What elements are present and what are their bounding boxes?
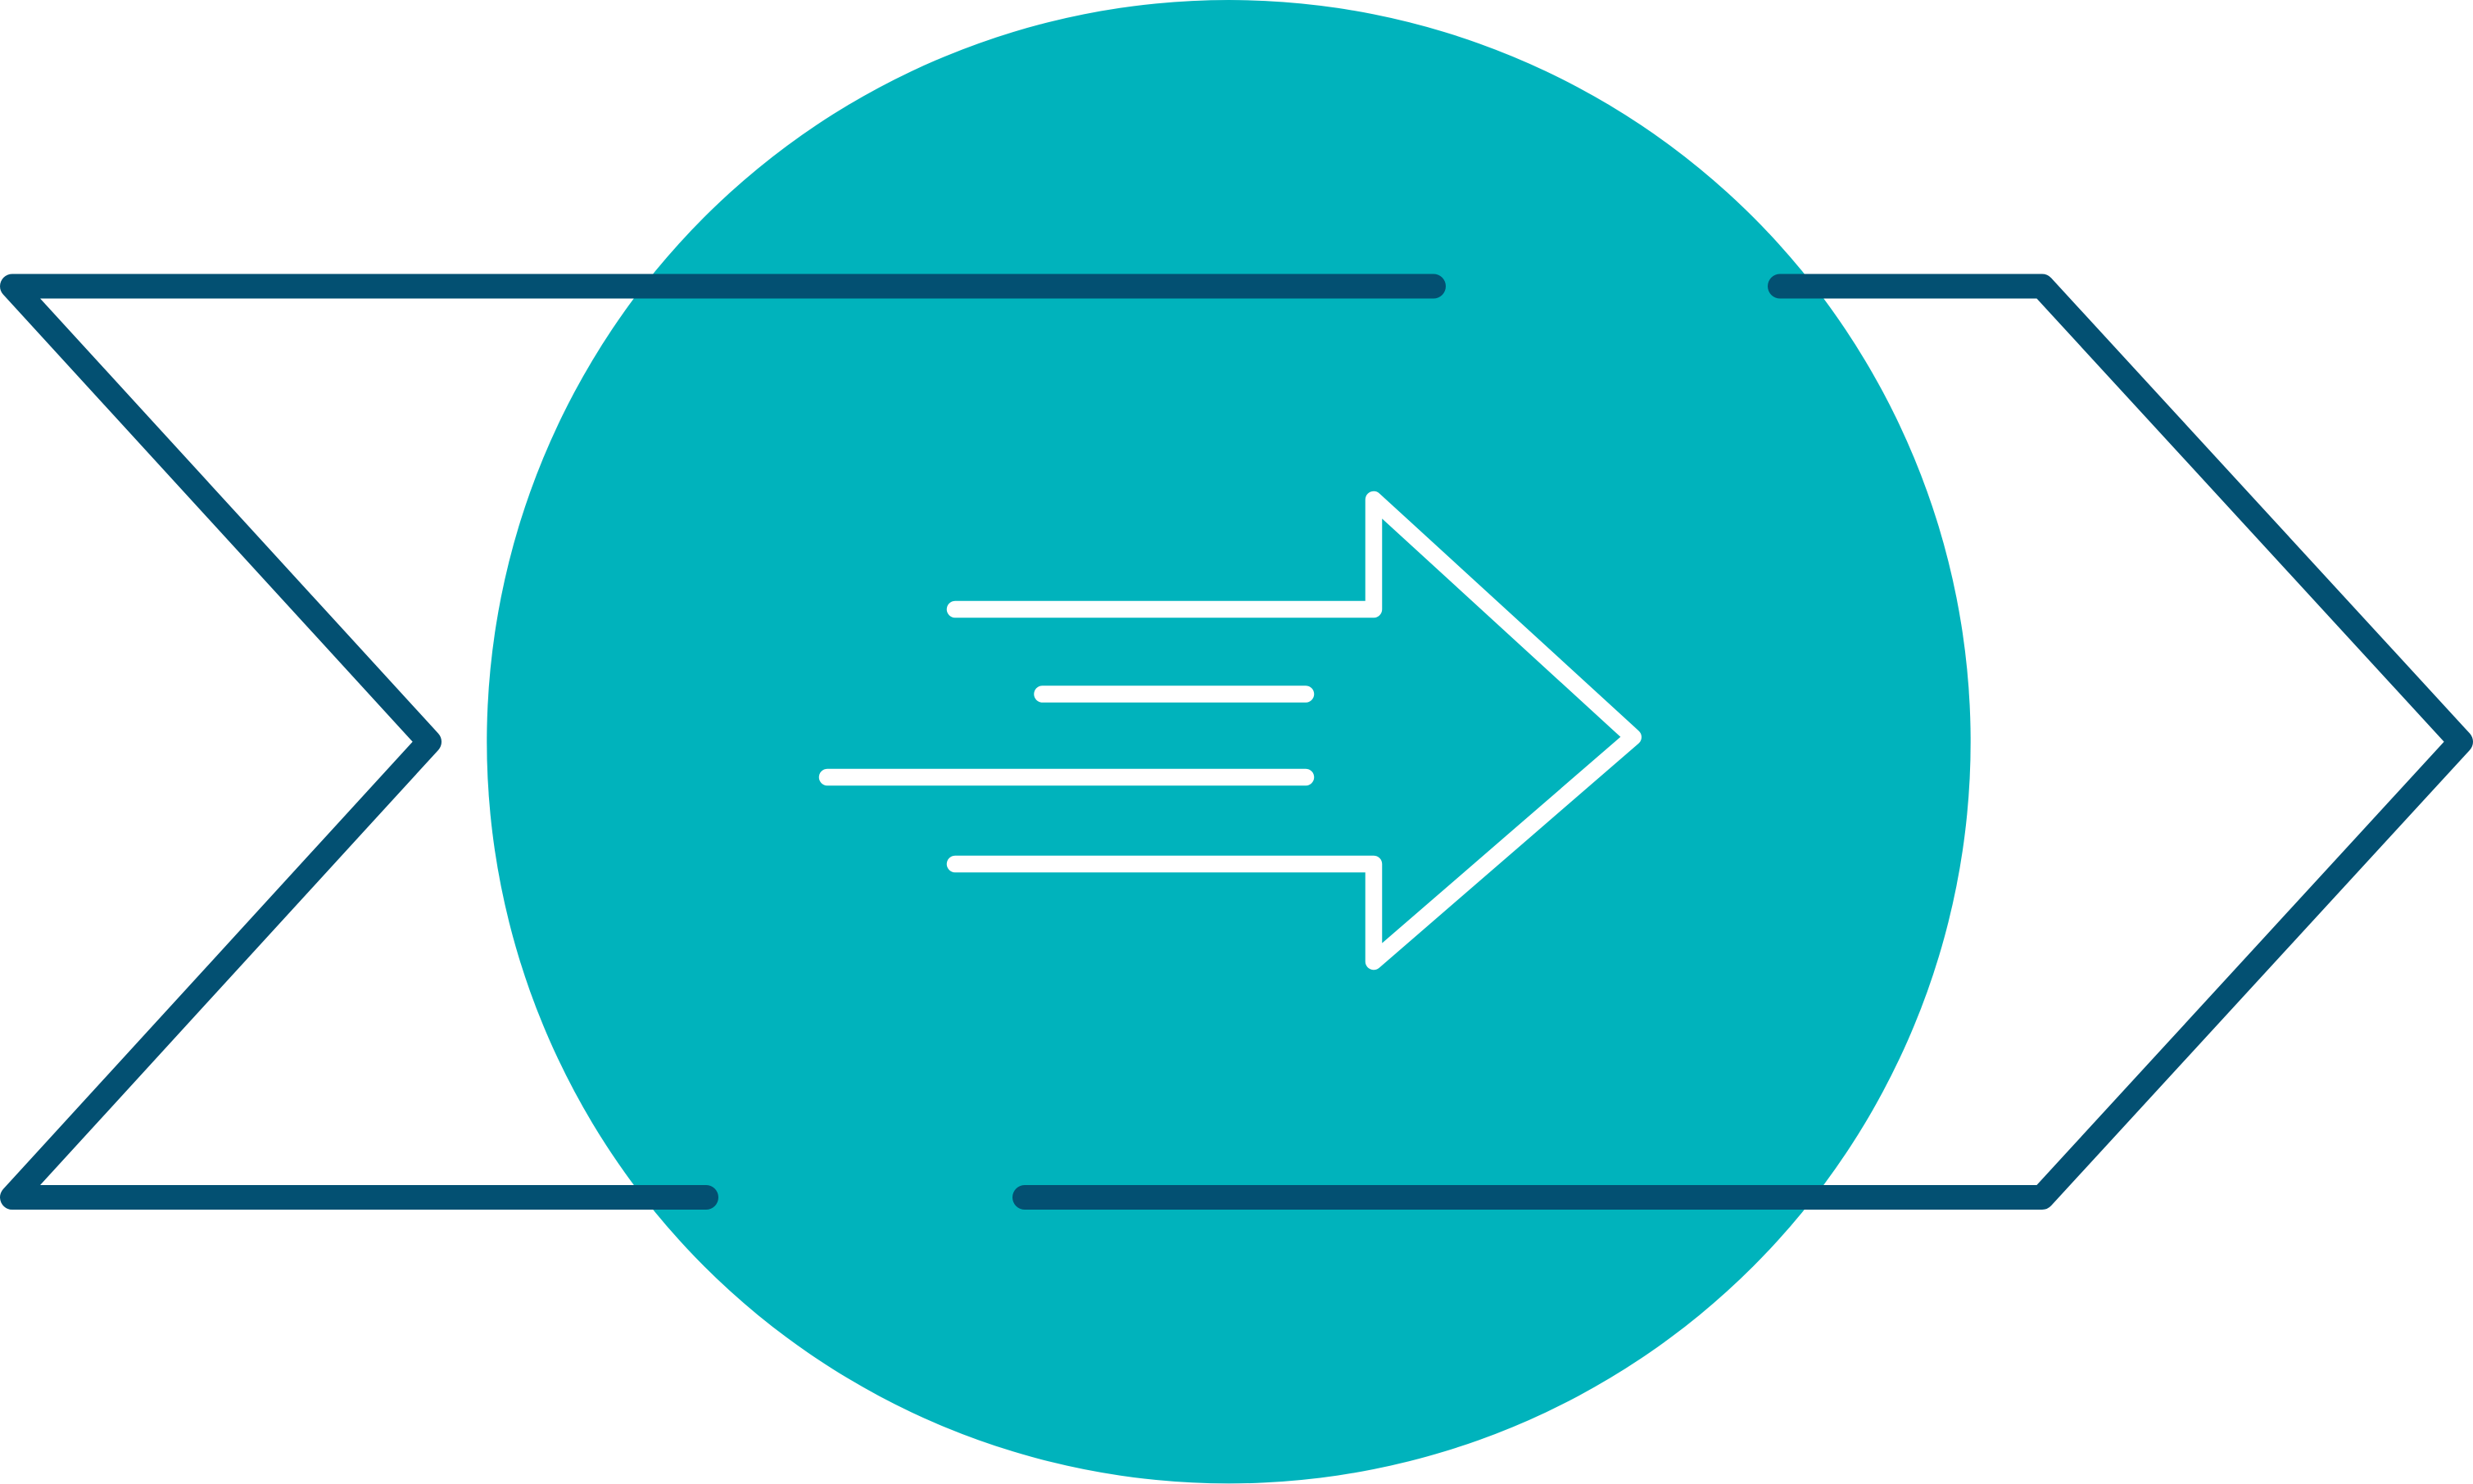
- speed line: short: [1042, 685, 1306, 703]
- right chevron outline: [1025, 287, 2461, 1197]
- teal circle: [487, 0, 1971, 1483]
- arrow head outline: [955, 500, 1633, 961]
- speed line: long: [827, 769, 1306, 785]
- icon: speed arrow: [827, 500, 1633, 961]
- left chevron outline: [12, 287, 1434, 1197]
